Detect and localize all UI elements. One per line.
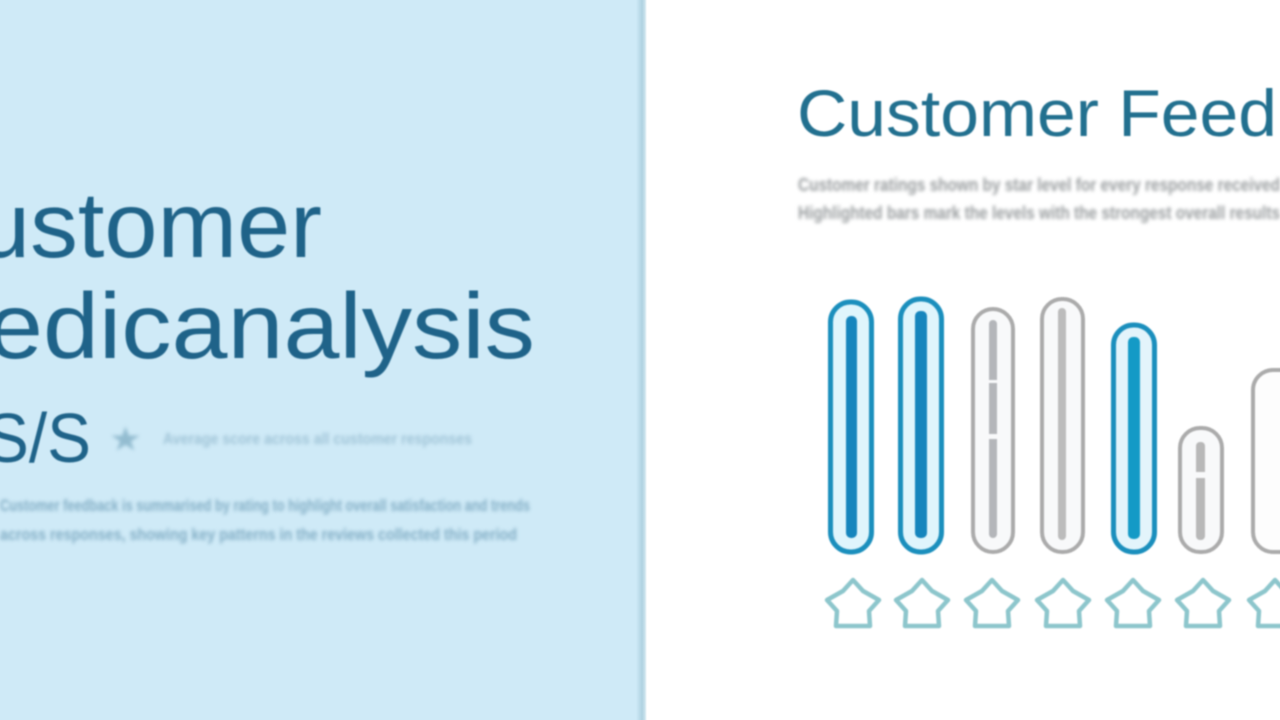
bar 4 [1042, 299, 1083, 552]
right description [798, 175, 1280, 223]
rating caption: Average score across all customer responses [163, 431, 472, 448]
star 5 [1107, 580, 1159, 626]
panel: right feedback chart [797, 76, 1280, 626]
panel: left summary [0, 0, 647, 720]
left description [0, 496, 530, 544]
bar 3 [973, 309, 1013, 552]
star 4 [1037, 580, 1089, 626]
star 6 [1177, 580, 1229, 626]
bar 2 [900, 299, 942, 552]
bar 5 [1114, 325, 1154, 552]
bar 1 [830, 302, 872, 552]
icon: rating glyph: ★ [111, 424, 140, 456]
left description: across responses, showing key patterns in the reviews collected this period [0, 525, 517, 544]
left title: edicanalysis [0, 274, 535, 378]
right title: Customer Feed [797, 76, 1277, 150]
star 7 [1249, 580, 1280, 626]
star 3 [966, 580, 1018, 626]
left description: Customer feedback is summarised by rating to highlight overall satisfaction and trends [0, 496, 530, 515]
bar 6 [1180, 428, 1222, 552]
star 1 [827, 580, 879, 626]
left title [0, 173, 535, 378]
star 2 [896, 580, 948, 626]
bar 7 [1253, 370, 1280, 552]
bar chart [830, 299, 1280, 552]
star rating row [827, 580, 1280, 626]
